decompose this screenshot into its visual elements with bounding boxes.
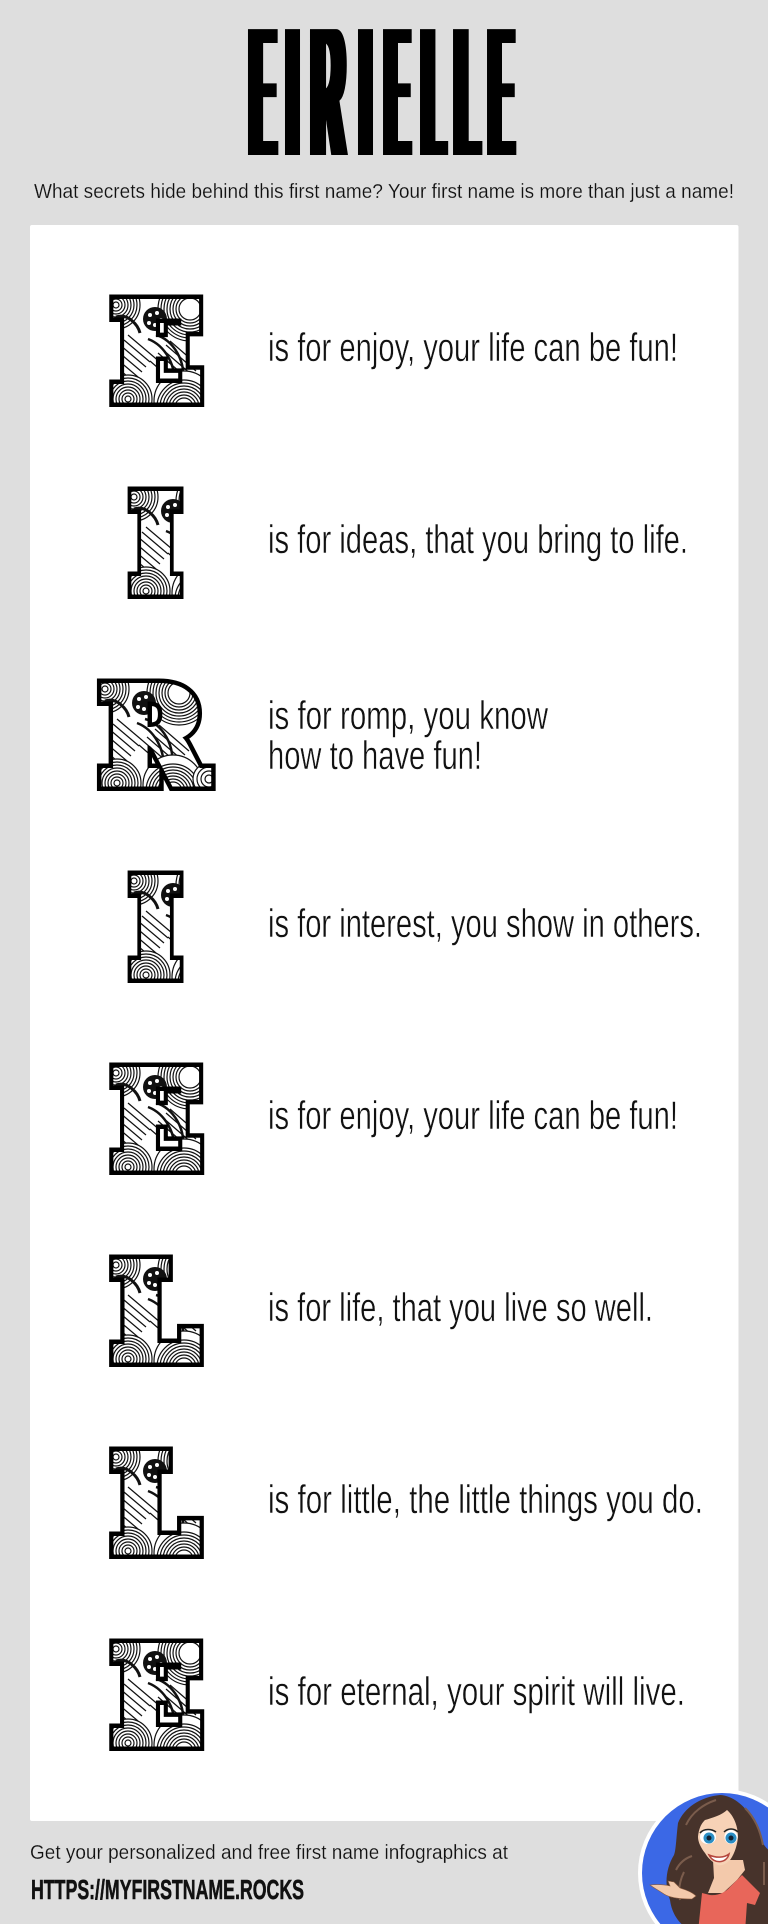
icon: letter R row 3: R bbox=[101, 663, 206, 811]
icon: letter E row 5: E bbox=[113, 1047, 201, 1195]
text: R romp: is for romp, you know bbox=[268, 694, 548, 738]
avatar: woman in blue circle bbox=[638, 1789, 768, 1924]
text: R romp bbox=[268, 694, 548, 778]
icon: letter E row 5: E bbox=[113, 1047, 201, 1195]
subtitle: What secrets hide behind this first name? Your first name is more than just a name! bbox=[34, 181, 734, 203]
panel: letter meanings bbox=[30, 225, 738, 1821]
icon: letter E row 8: E bbox=[113, 1623, 201, 1771]
icon: letter L row 7: L bbox=[113, 1431, 197, 1579]
icon: letter L row 7: L bbox=[113, 1431, 197, 1579]
icon: letter L row 6: L bbox=[113, 1239, 197, 1387]
footer text: Get your personalized and free first name infographics at bbox=[30, 1842, 508, 1864]
neck bbox=[708, 1860, 745, 1893]
footer url: HTTPS://MYFIRSTNAME.ROCKS bbox=[31, 1874, 304, 1905]
icon: letter L row 6: L bbox=[113, 1239, 197, 1387]
hair bbox=[667, 1795, 768, 1924]
icon: letter E row 8: E bbox=[113, 1623, 201, 1771]
icon: letter E row 1: E bbox=[113, 279, 201, 427]
icon: letter I row 4: I bbox=[131, 855, 180, 1003]
title bbox=[251, 0, 512, 194]
icon: letter E row 1: E bbox=[113, 279, 201, 427]
text: R romp: how to have fun! bbox=[268, 734, 482, 778]
eyes bbox=[700, 1830, 716, 1844]
icon: letter I row 2: I bbox=[131, 471, 180, 619]
shirt bbox=[698, 1875, 760, 1924]
face bbox=[698, 1810, 738, 1865]
mouth bbox=[709, 1854, 729, 1862]
hand bbox=[650, 1881, 696, 1899]
icon: letter I row 2: I bbox=[131, 471, 180, 619]
icon: letter I row 4: I bbox=[131, 855, 180, 1003]
icon: letter R row 3: R bbox=[101, 663, 206, 811]
